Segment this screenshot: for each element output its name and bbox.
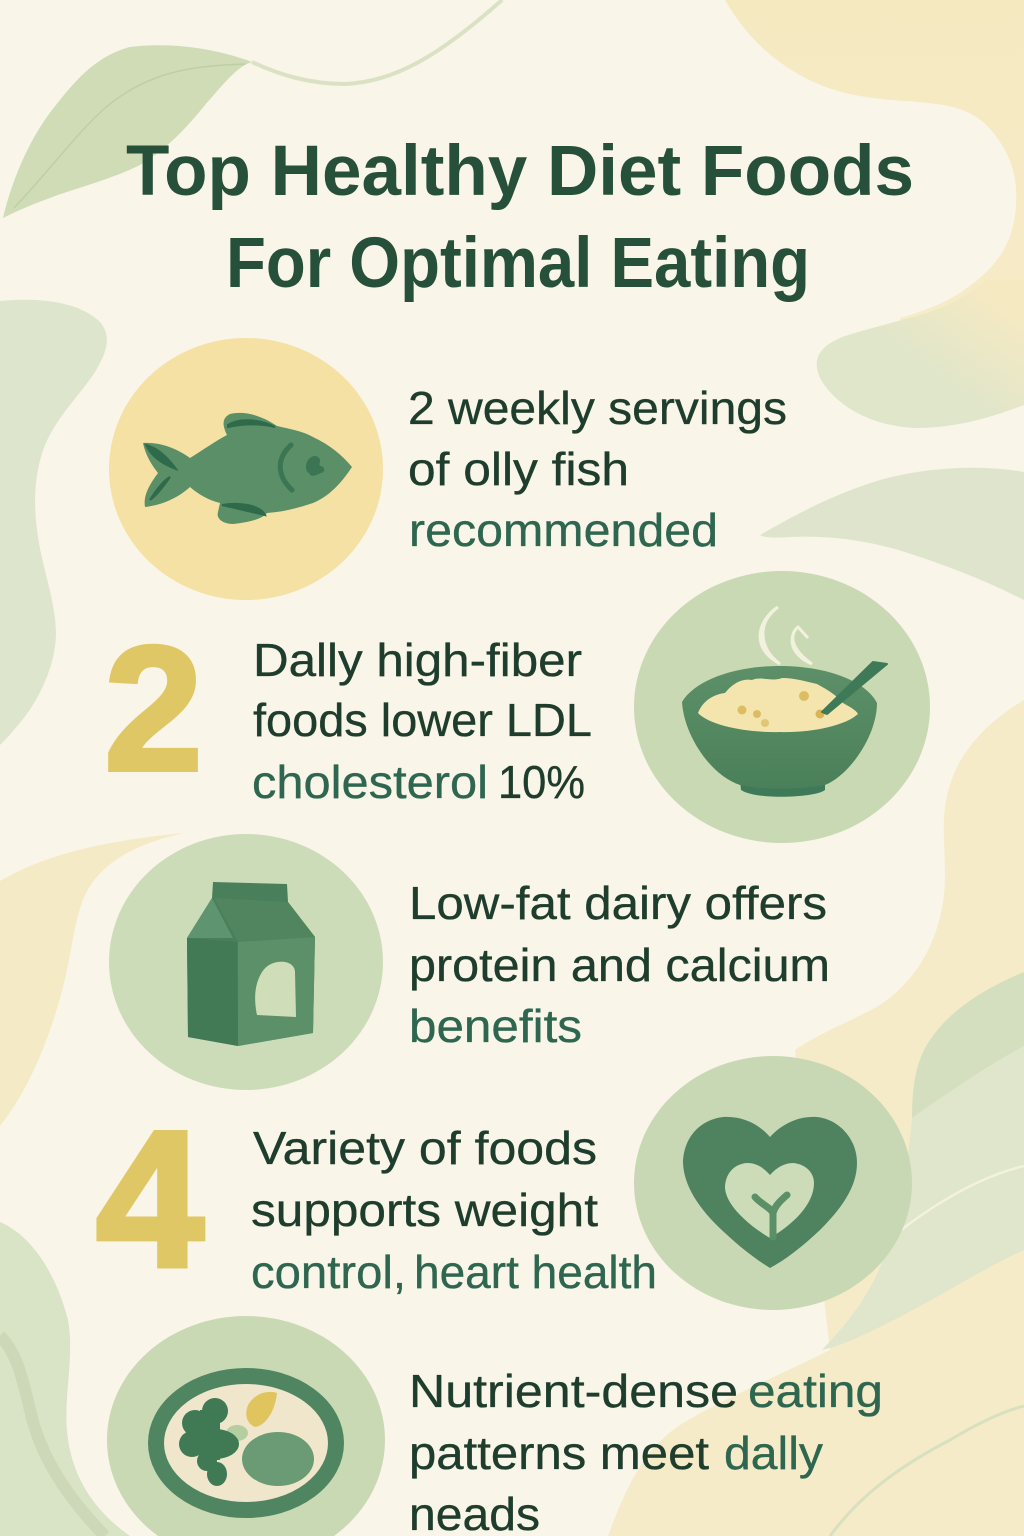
panel: oily fish — [109, 338, 787, 600]
text: dairy — [409, 877, 830, 1052]
text: nutrient-dense: dally — [724, 1427, 823, 1479]
title: Top Healthy Diet Foods — [126, 132, 914, 211]
text: dairy: benefits — [409, 1000, 582, 1052]
text: fish servings: of olly fish — [408, 443, 629, 495]
text: nutrient-dense: Nutrient-dense — [409, 1365, 738, 1417]
icon: fish — [143, 413, 352, 524]
text: variety: control, — [251, 1246, 406, 1298]
text: variety: heart health — [414, 1246, 657, 1298]
text: variety — [251, 1122, 657, 1298]
text: high-fiber: cholesterol — [252, 756, 488, 808]
text: high-fiber: Dally high-fiber — [253, 634, 582, 686]
number 4: 4 — [96, 1091, 204, 1308]
text: nutrient-dense: eating — [748, 1365, 883, 1417]
text: high-fiber: 10% — [498, 756, 585, 808]
icon: porridge bowl — [682, 607, 887, 797]
text: high-fiber: foods lower LDL — [253, 694, 592, 746]
panel: high-fiber foods — [104, 571, 930, 843]
text: nutrient-dense — [409, 1365, 883, 1536]
icon: plate of food — [156, 1376, 336, 1510]
panel: variety of foods — [96, 1056, 912, 1310]
text: fish servings — [408, 382, 787, 556]
text: dairy: Low-fat dairy offers — [409, 877, 827, 929]
icon: heart with sprout — [683, 1117, 857, 1268]
number 2: 2 — [104, 609, 203, 808]
title: For Optimal Eating — [226, 224, 810, 303]
text: variety: supports weight — [251, 1184, 598, 1236]
text: dairy: protein and calcium — [409, 939, 830, 991]
text: high-fiber — [252, 634, 592, 808]
text: nutrient-dense: patterns meet — [409, 1427, 709, 1479]
text: fish servings: 2 weekly servings — [408, 382, 787, 434]
panel: nutrient-dense eating — [107, 1316, 883, 1536]
text: variety: Variety of foods — [253, 1122, 597, 1174]
text: fish servings: recommended — [409, 504, 718, 556]
panel: low-fat dairy — [109, 834, 830, 1090]
icon: milk carton — [187, 882, 315, 1046]
title — [126, 132, 914, 303]
